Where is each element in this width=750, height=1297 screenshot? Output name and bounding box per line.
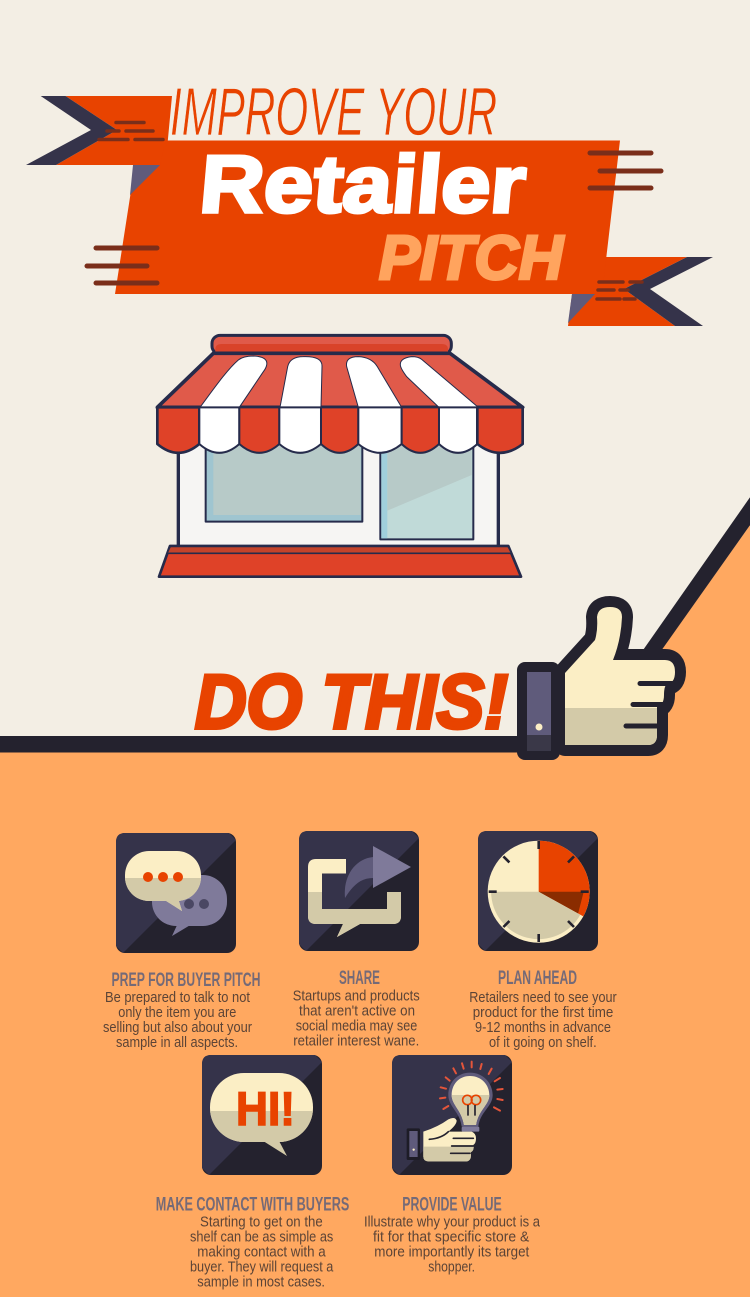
text: prep for buyer pitch: sample in all aspects. [116,1035,238,1051]
icon: clock [478,831,598,951]
text: prep for buyer pitch: only the item you are [118,1005,236,1021]
text: share: social media may see [296,1019,417,1035]
text: plan ahead: Retailers need to see your [469,990,617,1006]
store: right window [380,443,473,539]
tip: prep for buyer pitch [103,833,260,1051]
text: share: that aren't active on [299,1004,415,1020]
text: provide value: fit for that specific store & [373,1230,530,1246]
text: prep for buyer pitch: Be prepared to talk to not [105,990,250,1006]
icon: light bulb and hand [392,1055,512,1175]
icon: hi speech bubble [202,1055,322,1175]
speed lines: small left [99,122,163,140]
thumb: cuff [517,662,560,760]
banner: right ribbon tail [568,257,687,326]
thumb: hand fill [565,607,675,745]
icon: share arrow [299,831,419,951]
tip: share [293,831,420,1050]
text: make contact with buyers: buyer. They will request a [190,1260,334,1276]
heading: do this: DO THIS! [195,660,508,745]
thumb: finger lines [626,684,672,726]
banner: right fold [568,294,595,323]
text: make contact with buyers [190,1215,334,1291]
background: orange lower area [0,525,750,1297]
illustration: storefront [157,335,523,577]
text: plan ahead: product for the first time [473,1005,613,1021]
heading: prep for buyer pitch: PREP FOR BUYER PITCH [112,970,260,991]
speed lines: small right [597,282,642,299]
thumb: hand shade [565,708,657,745]
heading: provide value: PROVIDE VALUE [402,1195,502,1216]
icon: thumbs up [517,607,675,760]
text: share [293,989,420,1050]
text: make contact with buyers: making contact with a [197,1245,327,1261]
tip: make contact with buyers [156,1055,349,1291]
title: retailer: Retailer [196,140,529,230]
tip: provide value [364,1055,541,1276]
rule: diagonal dark line [642,483,750,652]
heading: plan ahead: PLAN AHEAD [498,968,577,989]
heading: make contact with buyers: MAKE CONTACT WITH BUYERS [156,1195,349,1216]
icon: hi speech bubble: HI! [236,1082,295,1135]
speed lines: banner [87,153,661,283]
heading: share: SHARE [339,968,380,989]
thumb: cuff panel [527,672,551,735]
store: awning valance [157,407,523,453]
text: plan ahead: of it going on shelf. [489,1035,597,1051]
title: pitch: PITCH [379,224,564,293]
icon: speech bubbles [116,833,236,953]
store: wall [178,437,498,547]
thumb: cuff panel shade [527,735,551,751]
text: provide value [364,1215,541,1276]
text: plan ahead: 9-12 months in advance [475,1020,611,1036]
rule: horizontal dark line [0,736,525,752]
text: prep for buyer pitch [103,990,252,1051]
store: left window [206,443,362,522]
text: provide value: shopper. [428,1260,475,1276]
thumb: hand outline [565,607,675,745]
banner: left chevron [26,96,117,165]
title banner [26,96,713,326]
text: make contact with buyers: shelf can be as simple as [190,1230,333,1246]
text: share: Startups and products [293,989,420,1005]
banner: left ribbon tail [56,96,172,165]
thumb: button [536,724,542,730]
text: prep for buyer pitch: selling but also about your [103,1020,252,1036]
store: white awning stripes [200,356,478,407]
banner: left fold [130,165,160,195]
text: share: retailer interest wane. [293,1034,419,1050]
banner: right chevron [624,257,713,326]
tip: plan ahead [469,831,617,1051]
text: make contact with buyers: sample in most cases. [197,1275,325,1291]
store: awning slope [157,353,523,407]
text: make contact with buyers: Starting to get on the [200,1215,323,1231]
text: provide value: more importantly its target [374,1245,529,1261]
store: base [159,546,521,577]
text: provide value: Illustrate why your product is a [364,1215,541,1231]
text: plan ahead [469,990,617,1051]
title: improve your: IMPROVE YOUR [170,74,497,150]
banner: main band [115,140,620,294]
store: awning roll [212,335,451,354]
